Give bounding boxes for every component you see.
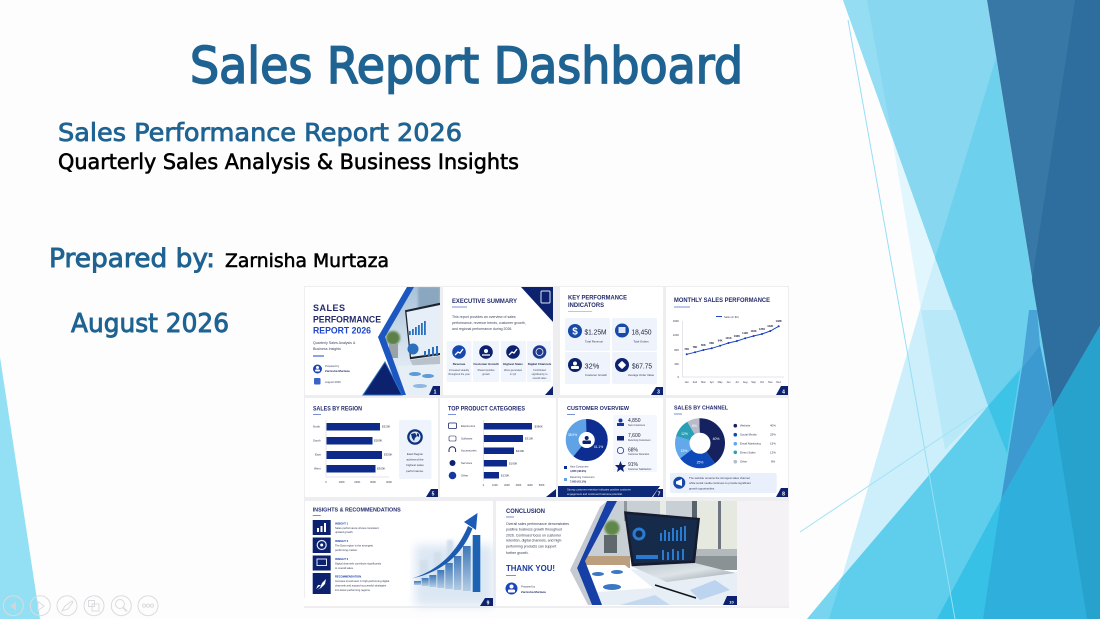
thumbnail 2: executive summary: overall sales [533, 377, 547, 380]
thumbnail 2: executive summary: and regional performance during 2026. [452, 327, 512, 331]
thumbnail 5: sales by region bar chart: $280K [374, 438, 382, 442]
thumbnail 9: insights and recommendations: upward growth. [335, 530, 354, 534]
thumbnail 8: sales by channel donut: Other [740, 460, 747, 464]
thumbnail 4: monthly sales line chart: 148K [776, 319, 782, 323]
thumbnail 7: customer overview donut: Customer Retention [628, 453, 650, 456]
thumbnail 4: monthly sales line chart: MONTHLY SALES PERFORMANCE [674, 297, 771, 304]
thumbnail 1: cover: 1 [434, 390, 437, 396]
thumbnail 8: sales by channel donut: while social media continues to provide significant [689, 481, 751, 485]
thumbnail 5: sales by region bar chart: 300K [370, 480, 376, 484]
thumbnail 2: executive summary: throughout the year [448, 373, 470, 376]
thumbnail 9: insights and recommendations: The East region is the strongest [335, 544, 373, 548]
thumbnail 2: executive summary: growth [482, 373, 490, 376]
thumbnail 5: sales by region bar chart: SALES BY REGION [313, 406, 362, 412]
thumbnail 4: monthly sales line chart: Sales (in $K) [724, 315, 739, 319]
thumbnail 3: key performance indicators: 18,450 [632, 328, 652, 336]
thumbnail 4: monthly sales line chart: 101K [725, 336, 732, 340]
thumbnail 10: conclusion [496, 501, 737, 606]
thumbnail 9: insights and recommendations: Sales performance shows consistent [335, 526, 379, 530]
thumbnail 2: executive summary: This report provides an overview of sales [452, 315, 516, 319]
thumbnail 4: monthly sales line chart: 86K [709, 341, 714, 345]
thumbnail 8: sales by channel donut: 40% [713, 437, 719, 441]
thumbnail 6: top product categories bar chart: Software [461, 436, 473, 440]
thumbnail 5: sales by region bar chart [305, 398, 438, 498]
thumbnail 5: sales by region bar chart: South [313, 438, 321, 442]
thumbnail 4: monthly sales line chart: 80K [701, 343, 706, 347]
thumbnail 3: key performance indicators: $ [572, 326, 578, 338]
thumbnail 7: customer overview donut: engagement and continued business potential. [567, 492, 623, 496]
thumbnail 7: customer overview donut [558, 398, 663, 498]
thumbnail 9: insights and recommendations: INSIGHT 1 [335, 522, 349, 526]
thumbnail 10: conclusion: further growth. [506, 551, 529, 555]
thumbnail 3: key performance indicators: KEY PERFORMANCE [568, 294, 628, 302]
thumbnail 5: sales by region bar chart: West [314, 466, 321, 470]
thumbnail 4: monthly sales line chart: Jun [726, 380, 731, 384]
thumbnail 6: top product categories bar chart: 400K [527, 484, 533, 487]
presentation toolbar [3, 596, 158, 616]
thumbnail 6: top product categories bar chart: $310K [525, 436, 533, 440]
thumbnail 2: executive summary: Revenue [453, 362, 466, 366]
thumbnail 4: monthly sales line chart: 94K [718, 338, 723, 342]
thumbnail 8: sales by channel donut: Website [740, 424, 751, 428]
thumbnail 6: top product categories bar chart: Services [461, 461, 473, 465]
thumbnail 4: monthly sales line chart: 40K [674, 362, 679, 366]
thumbnail 9: insights and recommendations: 9 [487, 600, 490, 606]
thumbnail 2: executive summary: significantly to [532, 373, 548, 376]
thumbnail 3: key performance indicators: Average Order Value [628, 373, 654, 377]
thumbnail 6: top product categories bar chart: 200K [504, 484, 510, 487]
thumbnail 8: sales by channel donut: 8% [692, 424, 697, 428]
thumbnail 5: sales by region bar chart: North [313, 424, 320, 428]
thumbnail 8: sales by channel donut: 8% [771, 460, 776, 464]
thumbnail 4: monthly sales line chart: Mar [701, 380, 706, 384]
thumbnail 1: cover: REPORT 2026 [313, 326, 371, 336]
thumbnail 5: sales by region bar chart: performance. [406, 469, 424, 473]
thumbnail 5: sales by region bar chart: 100K [339, 480, 345, 484]
thumbnail 8: sales by channel donut [666, 398, 788, 498]
thumbnail 8: sales by channel donut: growth opportunities. [689, 486, 715, 490]
thumbnail 10: conclusion: positive business growth throughout [506, 528, 562, 532]
thumbnail 9: insights and recommendations: Increase investment in high-performing digital [335, 579, 390, 583]
tagline: Quarterly Sales Analysis & Business Insights [58, 150, 519, 174]
thumbnail 7: customer overview donut: 38.9% [568, 433, 577, 437]
thumbnail 3: key performance indicators [560, 287, 663, 396]
thumbnail 8: sales by channel donut: Email Marketing [740, 442, 761, 446]
thumbnail 3: key performance indicators: INDICATORS [568, 302, 605, 309]
thumbnail 1: cover: Zarnisha Murtaza [325, 369, 350, 373]
thumbnail 3: key performance indicators: Total Orders [633, 340, 649, 344]
thumbnail 5: sales by region bar chart: 200K [354, 480, 361, 484]
date: August 2026 [71, 309, 229, 339]
thumbnail 7: customer overview donut: New Customers [628, 424, 646, 427]
thumbnail 3: key performance indicators: $67.75 [632, 362, 652, 370]
thumbnail 4: monthly sales line chart: Jul [735, 380, 739, 384]
thumbnail 2: executive summary: in Q4 [510, 373, 517, 376]
thumbnail 8: sales by channel donut: 8 [782, 492, 785, 498]
thumbnail 10: conclusion: retention, digital channels, and high- [506, 539, 563, 543]
thumbnail 2: executive summary: performance, revenue trends, customer growth, [452, 321, 526, 325]
thumbnail 3: key performance indicators: $1.25M [584, 328, 606, 336]
thumbnail 6: top product categories bar chart: TOP PRODUCT CATEGORIES [448, 406, 525, 412]
thumbnail 4: monthly sales line chart: Sep [751, 380, 756, 384]
thumbnail 2: executive summary: Customer Growth [473, 362, 499, 366]
thumbnail 7: customer overview donut: Customer Satisfaction [628, 468, 652, 471]
thumbnail 10: conclusion: 10 [729, 600, 734, 604]
thumbnail 10: conclusion: CONCLUSION [506, 508, 545, 515]
thumbnail 5: sales by region bar chart: East [315, 452, 321, 456]
thumbnail 6: top product categories bar chart: Electronics [461, 424, 476, 428]
thumbnail 8: sales by channel donut: SALES BY CHANNEL [674, 406, 728, 412]
thumbnail 9: insights and recommendations: channels and expand successful strategies [335, 584, 387, 588]
thumbnail 9: insights and recommendations: INSIGHT 3 [335, 557, 349, 561]
thumbnail 9: insights and recommendations: INSIGHTS & RECOMMENDATIONS [313, 508, 401, 514]
thumbnail 8: sales by channel donut: 12% [770, 450, 776, 454]
thumbnail 7: customer overview donut: New Customers [570, 464, 589, 468]
thumbnail 2: executive summary: Highest Sales [503, 362, 523, 366]
thumbnail 5: sales by region bar chart: $350K [384, 452, 392, 456]
thumbnail 5: sales by region bar chart: 400K [386, 480, 392, 484]
thumbnail 6: top product categories bar chart: 100K [492, 484, 498, 487]
thumbnail 10: conclusion: 2026. Continued focus on customer [506, 533, 562, 537]
thumbnail 7: customer overview donut: 7,600 [628, 433, 641, 439]
thumbnail 6: top product categories bar chart [440, 398, 556, 497]
thumbnail 9: insights and recommendations: Digital channels contribute significantly [335, 562, 382, 566]
thumbnail 1: cover: PERFORMANCE [313, 314, 381, 324]
thumbnail 7: customer overview donut: 91% [628, 462, 639, 468]
thumbnail 3: key performance indicators: 32% [584, 362, 600, 370]
thumbnail 4: monthly sales line chart: Feb [693, 380, 698, 384]
thumbnail 6: top product categories bar chart: $240K [516, 449, 524, 453]
thumbnail 2: executive summary: Were generated [504, 369, 523, 372]
thumbnail 4: monthly sales line chart: 125K [759, 327, 765, 331]
thumbnail 7: customer overview donut: 68% [628, 448, 639, 454]
thumbnail 4: monthly sales line chart: Oct [760, 380, 764, 384]
thumbnail 4: monthly sales line chart: 80K [674, 348, 679, 352]
author name: Zarnisha Murtaza [225, 250, 389, 272]
thumbnail 9: insights and recommendations: to overall sales. [335, 566, 354, 570]
thumbnail 9: insights and recommendations: into lower-performing regions. [335, 588, 371, 592]
thumbnail 6: top product categories bar chart: Accessories [461, 448, 477, 452]
thumbnail 7: customer overview donut: 61.1% [594, 445, 603, 449]
thumbnail 4: monthly sales line chart: Nov [768, 380, 773, 384]
thumbnail 9: insights and recommendations: INSIGHT 2 [335, 539, 349, 543]
thumbnail 8: sales by channel donut: 25% [697, 460, 703, 464]
decorative geometric shapes: right [800, 0, 1100, 619]
thumbnail 10: conclusion: THANK YOU! [506, 563, 555, 573]
slide thumbnails collage [304, 286, 789, 608]
thumbnail 1: cover [305, 287, 440, 396]
thumbnail 4: monthly sales line chart: May [718, 380, 723, 384]
thumbnail 6: top product categories bar chart: Other [461, 474, 468, 478]
thumbnail 4: monthly sales line chart: Apr [710, 380, 714, 384]
thumbnail 4: monthly sales line chart: 160K [673, 319, 679, 323]
thumbnail 4: monthly sales line chart: 72K [684, 347, 689, 351]
thumbnail 4: monthly sales line chart: 118K [751, 329, 757, 333]
thumbnail 10: conclusion: Zarnisha Murtaza [521, 590, 546, 594]
thumbnail 6: top product categories bar chart: $380K [534, 424, 543, 428]
thumbnail 5: sales by region bar chart: $300K [377, 466, 385, 470]
thumbnail 7: customer overview donut: Returning Customers [570, 475, 595, 479]
prepared by label: Prepared by: [49, 244, 215, 274]
thumbnail 3: key performance indicators: 3 [657, 390, 660, 396]
subtitle: Sales Performance Report 2026 [58, 118, 462, 147]
thumbnail 2: executive summary: EXECUTIVE SUMMARY [452, 298, 518, 305]
thumbnail 8: sales by channel donut: 40% [770, 424, 776, 428]
thumbnail 1: cover: Prepared by [325, 364, 340, 368]
thumbnail 8: sales by channel donut: 25% [770, 433, 776, 437]
thumbnail 4: monthly sales line chart: 112K [742, 331, 748, 335]
thumbnail 9: insights and recommendations: performing market. [335, 548, 358, 552]
thumbnail 5: sales by region bar chart: highest sales [406, 463, 424, 467]
thumbnail 4: monthly sales line chart [666, 287, 788, 396]
thumbnail 6: top product categories bar chart: 300K [516, 484, 522, 487]
thumbnail 7: customer overview donut: Strong customer retention indicates positive customer [567, 488, 631, 492]
thumbnail 10: conclusion: Prepared by [521, 584, 536, 588]
thumbnail 4: monthly sales line chart: 78K [693, 345, 698, 349]
title: Sales Report Dashboard [190, 37, 743, 95]
thumbnail 5: sales by region bar chart: 5 [432, 492, 435, 498]
thumbnail 3: key performance indicators: Total Revenue [585, 340, 603, 344]
thumbnail 7: customer overview donut: 7,600 (61.1%) [570, 480, 586, 484]
thumbnail 6: top product categories bar chart: $130K [501, 474, 509, 478]
thumbnail 4: monthly sales line chart: Jan [685, 380, 689, 384]
thumbnail 2: executive summary [443, 287, 553, 395]
thumbnail 10: conclusion: performing products can support [506, 545, 556, 549]
thumbnail 5: sales by region bar chart: $320K [382, 424, 390, 428]
thumbnail 3: key performance indicators: Customer Growth [585, 373, 607, 377]
thumbnail 6: top product categories bar chart: $190K [509, 462, 517, 466]
thumbnail 2: executive summary: Contributed [533, 369, 547, 372]
thumbnail 7: customer overview donut: 4,850 [628, 418, 641, 424]
decorative shape: left [0, 357, 40, 619]
thumbnail 2: executive summary: Digital Channels [528, 362, 552, 366]
thumbnail 4: monthly sales line chart: Aug [743, 380, 748, 384]
thumbnail 8: sales by channel donut: 15% [681, 449, 687, 453]
thumbnail 9: insights and recommendations: RECOMMENDATION [335, 574, 361, 578]
thumbnail 4: monthly sales line chart: 0 [678, 375, 680, 379]
thumbnail 10: conclusion: Overall sales performance demonstrates [506, 522, 569, 526]
thumbnail 4: monthly sales line chart: 132K [767, 324, 774, 328]
thumbnail 4: monthly sales line chart: 4 [782, 390, 785, 396]
thumbnail 1: cover: August 2026 [325, 380, 341, 384]
thumbnail 7: customer overview donut: Returning Customers [628, 439, 651, 442]
thumbnail 1: cover: Business Insights [313, 347, 341, 351]
thumbnail 8: sales by channel donut: 15% [770, 442, 776, 446]
thumbnail 2: executive summary: Increased steadily [449, 369, 470, 372]
thumbnail 4: monthly sales line chart: Dec [776, 380, 782, 384]
thumbnail 5: sales by region bar chart: 0 [325, 480, 327, 484]
thumbnail 1: cover: Quarterly Sales Analysis & [313, 341, 356, 345]
thumbnail 8: sales by channel donut: Direct Sales [740, 450, 756, 454]
thumbnail 7: customer overview donut: CUSTOMER OVERVIEW [567, 406, 629, 412]
thumbnail 6: top product categories bar chart: 0 [483, 484, 485, 487]
thumbnail 4: monthly sales line chart: 108K [734, 334, 740, 338]
thumbnail 5: sales by region bar chart: achieved the [406, 458, 424, 462]
thumbnail 5: sales by region bar chart: East Region [407, 452, 424, 456]
thumbnail 6: top product categories bar chart: 500K [539, 484, 545, 487]
thumbnail 1: cover: SALES [313, 303, 345, 313]
thumbnail 9: insights and recommendations [304, 501, 493, 606]
thumbnail 7: customer overview donut: 7 [658, 492, 661, 498]
thumbnail 7: customer overview donut: 4,850 (38.9%) [570, 469, 586, 473]
thumbnail 2: executive summary: Shared positive [477, 369, 495, 372]
thumbnail 8: sales by channel donut: 12% [681, 432, 688, 436]
thumbnail 8: sales by channel donut: Social Media [740, 433, 757, 437]
thumbnail 4: monthly sales line chart: 120K [673, 333, 679, 337]
thumbnail 8: sales by channel donut: The website remains the strongest sales channel, [689, 476, 751, 480]
